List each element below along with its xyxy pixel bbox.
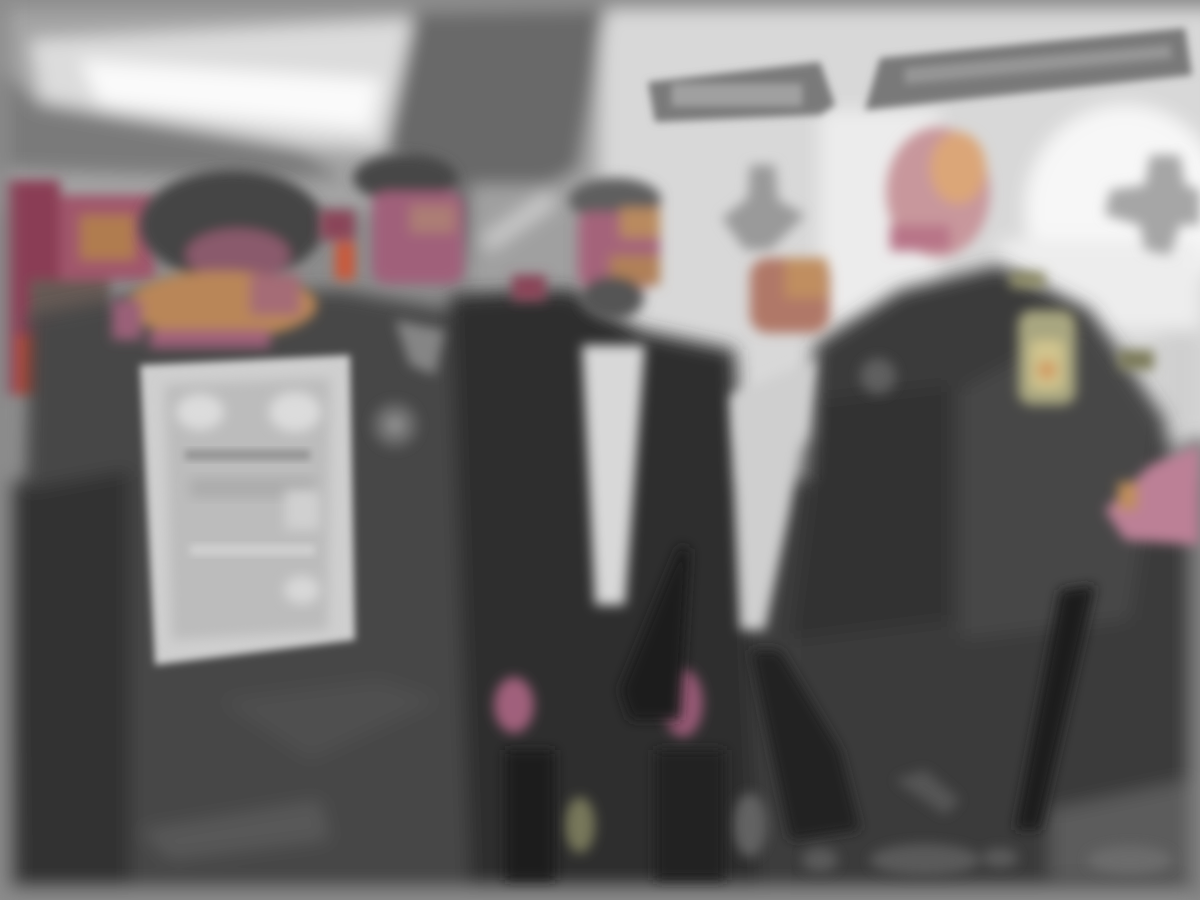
person 2: hair and face — [320, 154, 464, 447]
person 4: hand and shirt — [730, 258, 830, 630]
floor reflections — [802, 770, 1172, 876]
framed certificate — [140, 355, 355, 665]
person 1: hair and face — [112, 170, 324, 348]
person 3: hair, face and shirt — [512, 178, 661, 605]
person 5: bald head — [860, 127, 990, 394]
wall emblems — [722, 155, 1200, 255]
wall sign: lettering — [648, 28, 1192, 122]
hand at right edge — [1105, 445, 1200, 545]
red banner at left — [5, 180, 155, 395]
dark shadows between legs — [505, 545, 1095, 880]
clasped hands in front — [494, 669, 767, 857]
uniform badge — [1010, 272, 1154, 405]
